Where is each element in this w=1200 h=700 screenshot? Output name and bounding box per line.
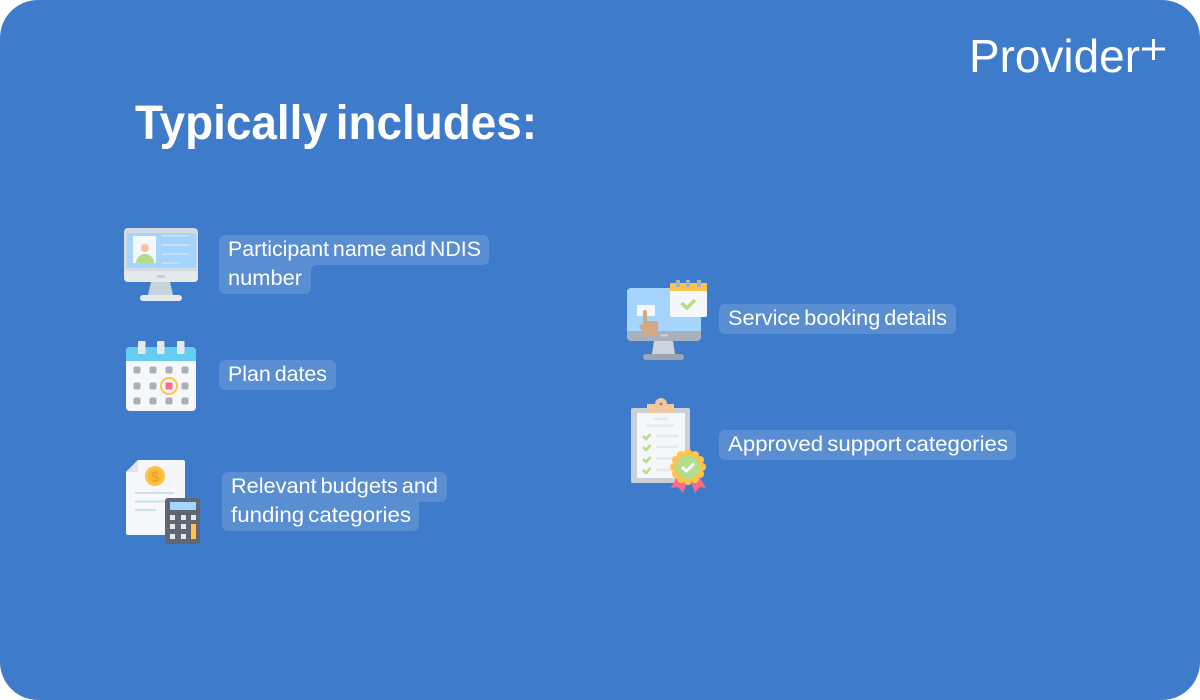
icon: computer with participant profile xyxy=(124,228,198,301)
chip: participant name and NDIS number: number xyxy=(228,267,302,290)
logo: Provider+: Provider xyxy=(969,30,1140,82)
title: Typically includes: xyxy=(135,97,537,150)
chip: plan dates: Plan dates xyxy=(228,363,327,386)
icon: service booking monitor xyxy=(627,280,707,360)
chip: relevant budgets and funding categories: Relevant budgets and xyxy=(231,475,438,498)
chip: relevant budgets and funding categories: funding categories xyxy=(231,504,411,527)
chip: relevant budgets and funding categories xyxy=(222,472,447,531)
icon: budget document and calculator: $ xyxy=(151,468,159,484)
chip: plan dates xyxy=(219,360,336,390)
icon: budget document and calculator xyxy=(126,460,200,544)
icon: calendar xyxy=(126,341,196,411)
chip: approved support categories: Approved support categories xyxy=(728,433,1008,456)
icon: clipboard with approval badge xyxy=(631,398,706,493)
chip: participant name and NDIS number: Participant name and NDIS xyxy=(228,238,481,261)
chip: service booking details: Service booking details xyxy=(728,307,947,330)
chip: approved support categories xyxy=(719,430,1016,460)
chip: service booking details xyxy=(719,304,956,334)
chip: participant name and NDIS number xyxy=(219,235,489,294)
